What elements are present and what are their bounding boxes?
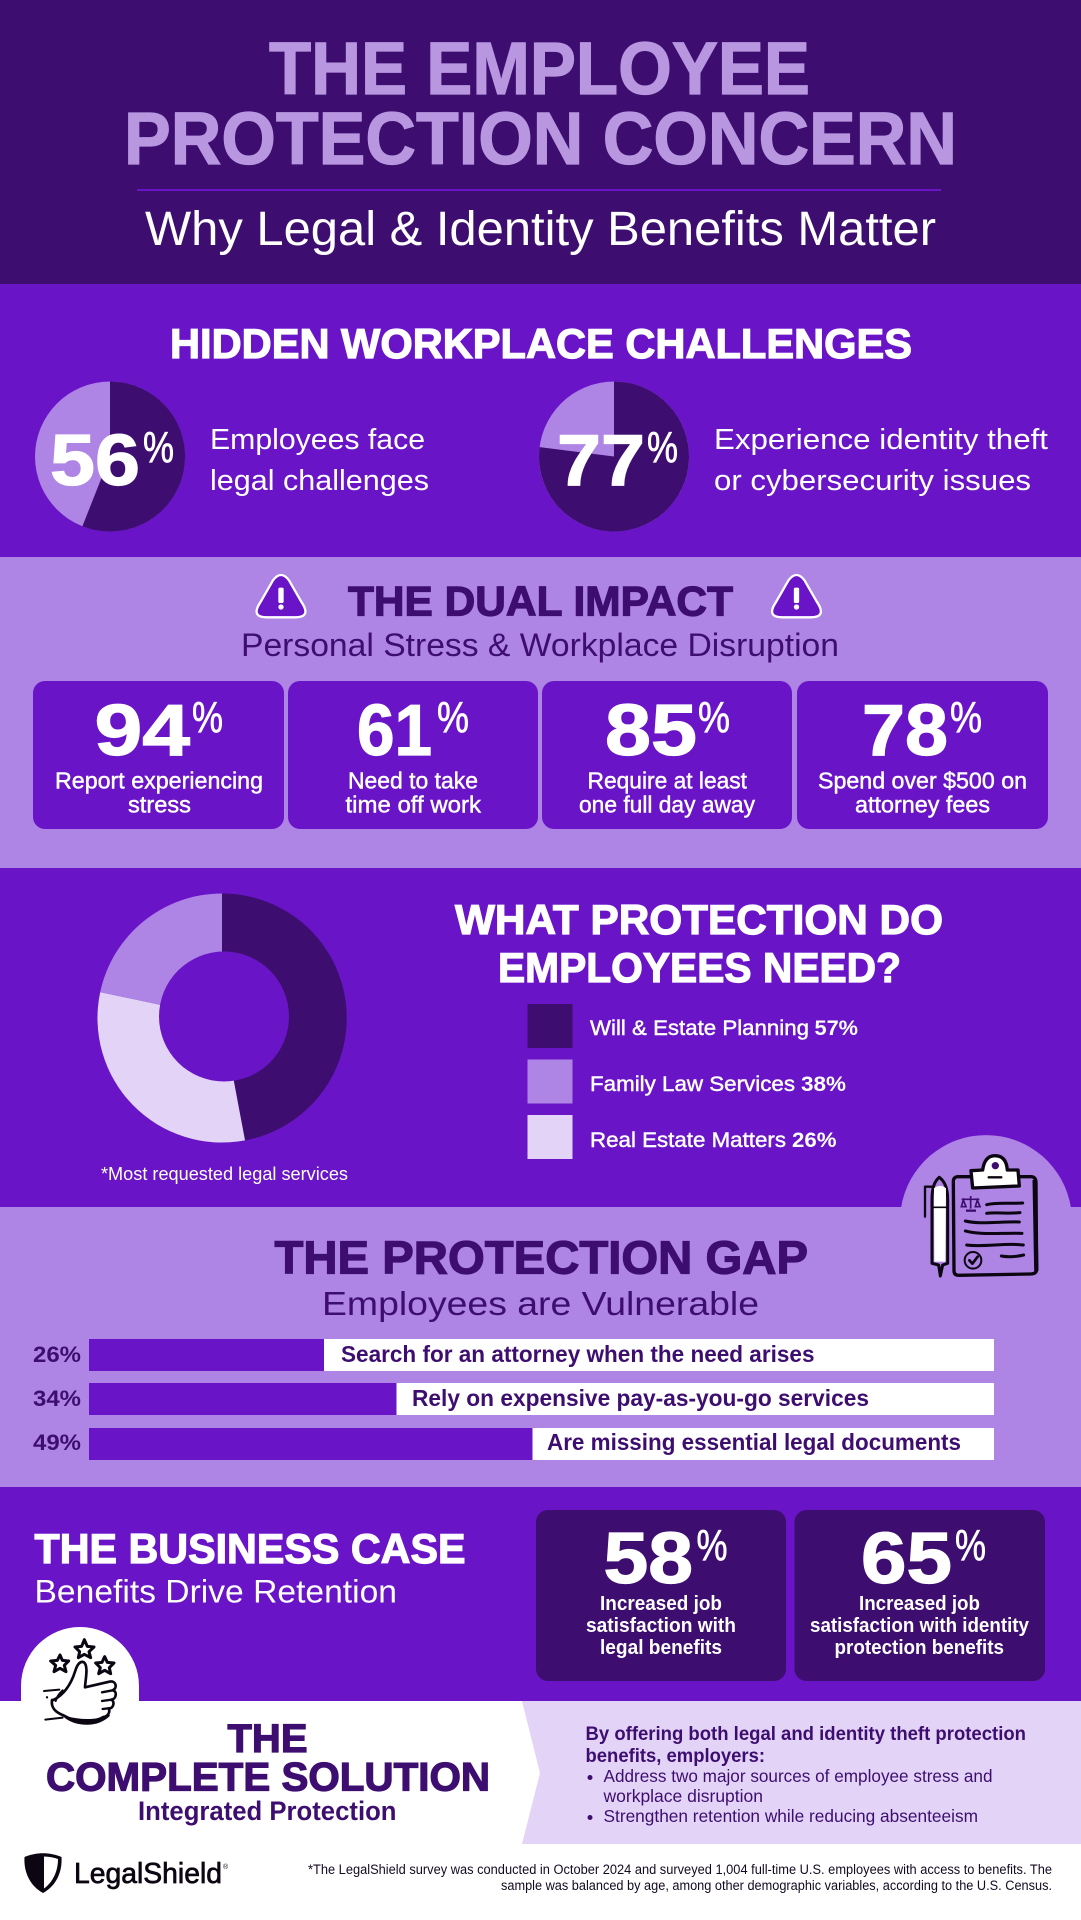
heading: THE PROTECTION GAP [274,1232,808,1284]
pie chart 56%: % [143,423,174,472]
stat text 56%: Employees face [210,424,425,456]
panel: dual impact [0,557,1081,868]
subheading: Employees are Vulnerable [322,1285,759,1322]
stat text 77%: Experience identity theft [714,424,1048,456]
stat card 94%: stress [128,792,191,818]
legend: Family Law Services [590,1072,795,1096]
stat card 58%: legal benefits [600,1636,722,1659]
stat card 85%: Require at least [588,768,748,794]
stat card 94%: % [192,693,223,742]
heading: THE [228,1717,308,1761]
arrow panel [522,1701,1081,1844]
stat card 58%: satisfaction with [586,1614,736,1637]
stat card 85% [542,681,792,829]
title [124,27,957,180]
bar 26%: Search for an attorney when the need arises [341,1341,814,1367]
stat card 61%: Need to take [348,768,478,794]
subheading: Integrated Protection [138,1796,396,1826]
stat card 65%: % [955,1521,986,1570]
stat text 56% [210,424,429,497]
panel: hidden workplace challenges [0,284,1081,557]
pie chart 77%: % [647,423,678,472]
stat card 85%: 85 [605,691,697,771]
stat card 58% [536,1510,786,1681]
title: PROTECTION CONCERN [124,97,957,180]
stat card 65%: satisfaction with identity [810,1614,1030,1637]
legend: Real Estate Matters [590,1128,786,1152]
stat card 58%: Increased job [600,1592,722,1615]
icon: thumbs up with stars [21,1627,139,1724]
bar 49%: 49% [33,1430,81,1455]
bar 26% [33,1339,994,1371]
stat card 78%: 78 [862,691,948,771]
solution text: Strengthen retention while reducing absenteeism [604,1806,978,1826]
heading [455,896,943,991]
stat card 65%: protection benefits [834,1636,1004,1659]
stat card 78%: % [950,693,982,742]
legend: 38% [801,1072,846,1096]
heading [46,1717,490,1800]
heading: EMPLOYEES NEED? [498,944,901,991]
icon: alert left [257,575,305,617]
legend: 26% [792,1128,836,1152]
stat card 65% [794,1510,1045,1681]
solution text: Address two major sources of employee stress and [604,1766,992,1786]
stat card 61%: time off work [346,792,482,818]
stat card 58%: % [696,1521,728,1570]
stat card 94%: Report experiencing [55,768,263,794]
logo [24,1853,229,1893]
survey footnote: *The LegalShield survey was conducted in October 2024 and surveyed 1,004 full-time U.S. employees with access to benefits. The [308,1862,1052,1877]
legend: Will & Estate Planning [590,1016,809,1040]
pie chart 77%: 77 [557,421,645,501]
subtitle: Why Legal & Identity Benefits Matter [145,203,936,256]
heading: HIDDEN WORKPLACE CHALLENGES [170,320,912,367]
solution text: workplace disruption [603,1786,763,1806]
solution text: By offering both legal and identity theft protection [586,1723,1026,1745]
stat card 65%: 65 [861,1519,952,1599]
panel: protection gap [0,1207,1081,1487]
icon: alert right [772,575,821,617]
stat text 77% [714,424,1048,497]
bar 34%: 34% [33,1386,81,1411]
panel: header [0,0,1081,284]
legend [528,1004,858,1159]
panel: complete solution [0,1701,1081,1844]
panel: footer [24,1853,1052,1893]
solution text: benefits, employers: [586,1745,765,1767]
title: THE EMPLOYEE [269,27,810,110]
icon: clipboard and pen [901,1135,1071,1276]
stat card 58%: 58 [604,1519,693,1599]
heading: WHAT PROTECTION DO [455,896,943,943]
subheading: Personal Stress & Workplace Disruption [241,627,839,663]
stat card 61%: % [437,693,469,742]
survey footnote [308,1862,1052,1893]
solution text [586,1723,1026,1826]
stat card 85%: one full day away [579,792,755,818]
logo: LegalShield [74,1858,222,1890]
stat card 85%: % [698,693,730,742]
stat card 61% [288,681,538,829]
stat text 56%: legal challenges [210,465,429,497]
pie chart 77% [539,382,689,532]
stat text 77%: or cybersecurity issues [714,465,1031,497]
stat card 94% [33,681,284,829]
legend: 57% [814,1016,858,1040]
stat card 78%: attorney fees [855,792,990,818]
bar 34% [33,1383,994,1415]
stat card 94%: 94 [94,691,190,771]
bar 49% [33,1428,994,1460]
survey footnote: sample was balanced by age, among other demographic variables, according to the U.S. Census. [501,1878,1052,1893]
stat card 65%: Increased job [859,1592,980,1615]
panel: what protection do employees need [0,868,1081,1207]
logo: ® [223,1863,229,1871]
pie chart 56%: 56 [50,421,140,501]
stat card 78% [797,681,1048,829]
pie chart 56% [35,381,185,532]
donut caption: *Most requested legal services [101,1164,348,1184]
donut chart [97,893,347,1143]
subheading: Benefits Drive Retention [34,1574,397,1610]
heading: COMPLETE SOLUTION [46,1756,490,1800]
heading: THE DUAL IMPACT [348,578,733,624]
stat card 78%: Spend over $500 on [818,768,1027,794]
bar 34%: Rely on expensive pay-as-you-go services [412,1385,869,1411]
heading: THE BUSINESS CASE [34,1525,466,1572]
bar 26%: 26% [33,1342,81,1367]
bar 49%: Are missing essential legal documents [547,1429,961,1455]
stat card 61%: 61 [357,691,432,771]
panel: business case [0,1487,1081,1701]
